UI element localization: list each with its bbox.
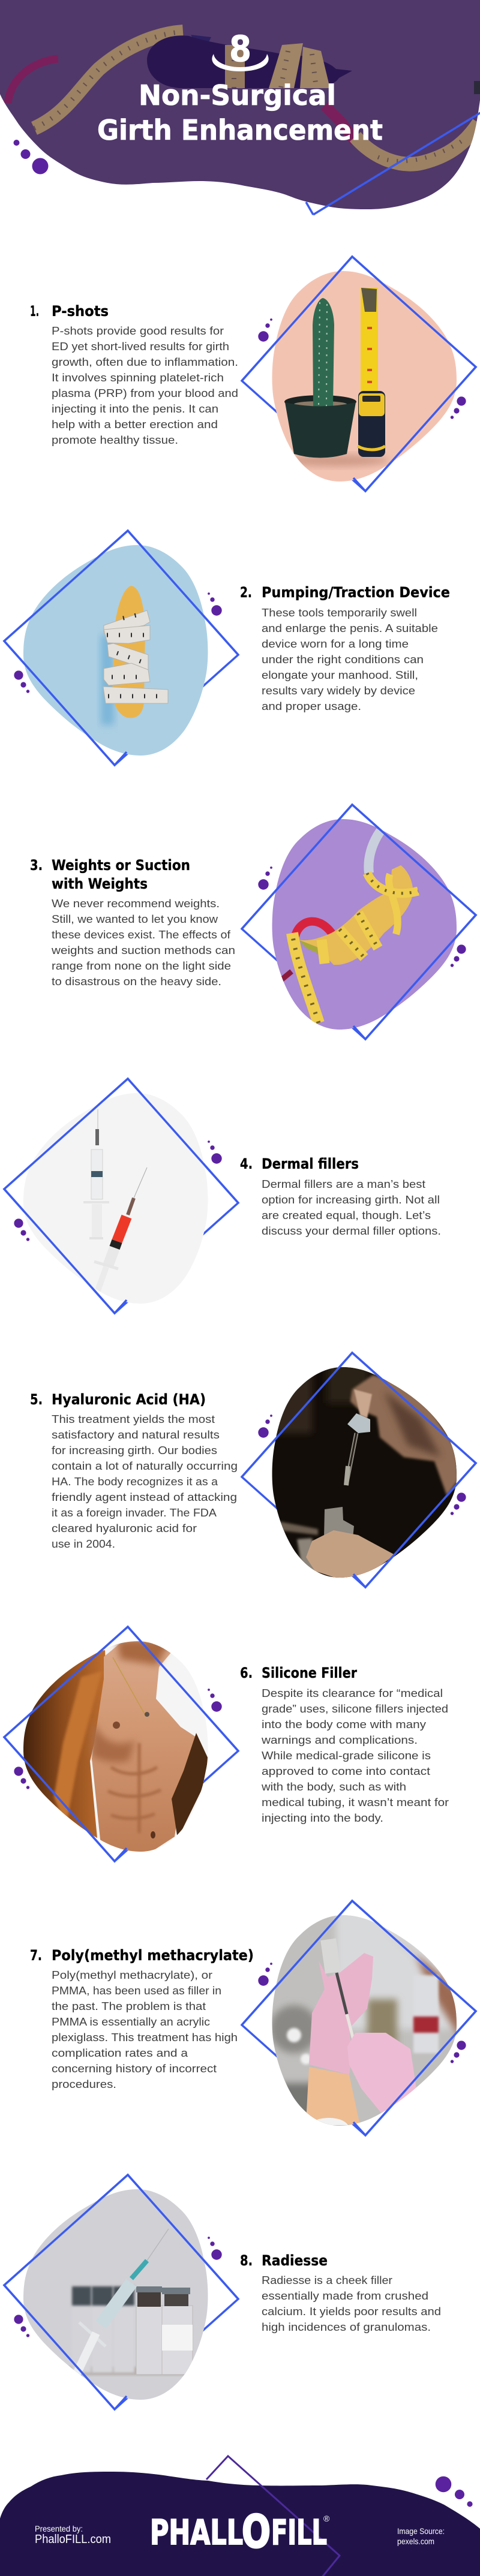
text block: growth, often due to inflammation. bbox=[52, 356, 238, 368]
logo: PHALL bbox=[150, 2513, 243, 2553]
footer dots bbox=[436, 2476, 473, 2507]
text block: satisfactory and natural results bbox=[52, 1428, 220, 1441]
image panel: banana wrapped in tape bbox=[242, 805, 476, 1039]
title: Girth Enhancement bbox=[97, 114, 383, 146]
text block: essentially made from crushed bbox=[262, 2289, 428, 2302]
text block: to disastrous on the heavy side. bbox=[52, 975, 221, 988]
image panel: gloved hands with syringe bbox=[242, 1901, 476, 2135]
text block: friendly agent instead of attacking bbox=[52, 1491, 237, 1503]
title number with crescent bbox=[212, 28, 269, 71]
heading: Pumping/Traction Device bbox=[262, 584, 450, 601]
text block: plasma (PRP) from your blood and bbox=[52, 387, 238, 399]
text block: for increasing girth. Our bodies bbox=[52, 1444, 217, 1456]
text block: These tools temporarily swell bbox=[262, 606, 417, 619]
text block: Dermal fillers are a man’s best bbox=[262, 1178, 425, 1190]
heading bbox=[240, 2252, 328, 2269]
text block: promote healthy tissue. bbox=[52, 434, 178, 446]
heading: 1. bbox=[30, 303, 39, 320]
text block: these devices exist. The effects of bbox=[52, 928, 231, 941]
text block: elongate your manhood. Still, bbox=[262, 669, 418, 681]
heading: 2. bbox=[240, 584, 252, 601]
text block: Poly(methyl methacrylate), or bbox=[52, 1969, 212, 1981]
heading: Poly(methyl methacrylate) bbox=[52, 1947, 254, 1964]
decorative diamond corner: hidden part bbox=[306, 202, 313, 215]
text block bbox=[261, 1687, 449, 1824]
text block: and proper usage. bbox=[262, 700, 361, 712]
text block: Despite its clearance for “medical bbox=[262, 1687, 443, 1699]
dots bbox=[14, 1140, 222, 1241]
dots bbox=[258, 1963, 466, 2063]
text block bbox=[262, 606, 438, 712]
text block: complication rates and a bbox=[52, 2047, 188, 2059]
logo bbox=[150, 2505, 330, 2558]
text block: and enlarge the penis. A suitable bbox=[262, 622, 438, 634]
text block: calcium. It yields poor results and bbox=[262, 2305, 441, 2318]
text block: injecting into the body. bbox=[262, 1811, 383, 1824]
presented by bbox=[35, 2524, 111, 2546]
text block: approved to come into contact bbox=[262, 1765, 430, 1777]
footer blob bbox=[0, 2472, 480, 2576]
image panel: vials and syringe bbox=[4, 2175, 238, 2409]
text block: with the body, such as with bbox=[261, 1780, 406, 1793]
text block: concerning history of incorrect bbox=[52, 2062, 217, 2075]
heading bbox=[30, 857, 190, 892]
text block: are created equal, though. Let’s bbox=[262, 1209, 431, 1221]
title number with crescent: 8 bbox=[229, 28, 251, 70]
text block: medical tubing, it wasn’t meant for bbox=[262, 1796, 449, 1808]
decorative diamond corner: front part bbox=[313, 105, 480, 215]
presented by: PhalloFILL.com bbox=[35, 2533, 111, 2546]
text block: HA. The body recognizes it as a bbox=[52, 1475, 218, 1488]
heading: 5. bbox=[30, 1391, 43, 1408]
text block: device worn for a long time bbox=[262, 637, 409, 650]
text block: grade” uses, silicone fillers injected bbox=[262, 1702, 448, 1715]
dots bbox=[258, 1415, 466, 1515]
dots bbox=[14, 2237, 222, 2337]
text block: ED yet short-lived results for girth bbox=[52, 340, 229, 353]
logo: FILL bbox=[271, 2513, 327, 2553]
text block: plexiglass. This treatment has high bbox=[52, 2031, 238, 2044]
image panel: male torso bbox=[4, 1627, 238, 1861]
panel: 5 Hyaluronic Acid bbox=[30, 1353, 476, 1587]
panel: 4 Dermal fillers bbox=[4, 1079, 441, 1313]
dots bbox=[14, 592, 222, 693]
text block: cleared hyaluronic acid for bbox=[52, 1522, 197, 1534]
presented by: Presented by: bbox=[35, 2524, 83, 2533]
title: Non-Surgical bbox=[139, 79, 336, 112]
text block: range from none on the light side bbox=[52, 959, 231, 972]
text block bbox=[262, 1178, 441, 1237]
heading: with Weights bbox=[52, 875, 148, 892]
text block: While medical-grade silicone is bbox=[262, 1749, 431, 1762]
heading: Silicone Filler bbox=[262, 1665, 357, 1681]
text block: it as a foreign invader. The FDA bbox=[52, 1506, 217, 1519]
text block: P-shots provide good results for bbox=[52, 324, 224, 337]
heading: 3. bbox=[30, 857, 43, 874]
text block: PMMA is essentially an acrylic bbox=[52, 2015, 210, 2028]
logo: ® bbox=[323, 2514, 330, 2523]
header blob background bbox=[0, 0, 480, 209]
panel: 2 Pumping/Traction Device bbox=[4, 531, 450, 765]
footer diamond outline bbox=[206, 2456, 340, 2576]
text block: injecting it into the penis. It can bbox=[52, 402, 218, 415]
text block: discuss your dermal filler options. bbox=[262, 1224, 441, 1237]
text block: weights and suction methods can bbox=[51, 944, 235, 956]
panel: 3 Weights or Suction bbox=[30, 805, 476, 1039]
text block: results vary widely by device bbox=[262, 684, 415, 697]
heading bbox=[30, 303, 109, 320]
text block: use in 2004. bbox=[52, 1537, 115, 1550]
image panel: two syringes bbox=[4, 1079, 238, 1313]
text block: under the right conditions can bbox=[262, 653, 424, 666]
text block: into the body come with many bbox=[262, 1718, 427, 1731]
panel: 1 P-shots bbox=[30, 257, 476, 491]
heading: Dermal fillers bbox=[262, 1155, 359, 1172]
text block: We never recommend weights. bbox=[52, 897, 220, 910]
image source: Image Source: bbox=[397, 2526, 445, 2536]
dots bbox=[258, 866, 466, 967]
dots bbox=[14, 1689, 222, 1789]
text block: It involves spinning platelet-rich bbox=[52, 371, 224, 384]
heading: P-shots bbox=[52, 303, 109, 320]
text block: PMMA, has been used as filler in bbox=[52, 1984, 221, 1997]
header photo: eggplant wrapped with measuring tape bbox=[8, 32, 480, 164]
header banner bbox=[0, 0, 480, 215]
text block bbox=[262, 2274, 441, 2333]
heading: 6. bbox=[240, 1665, 253, 1681]
dots bbox=[13, 140, 48, 174]
logo: O bbox=[242, 2505, 271, 2558]
image panel: corn wrapped in tape bbox=[4, 531, 238, 765]
heading: 8. bbox=[240, 2252, 253, 2269]
image panel: dropper and bottle bbox=[242, 1353, 476, 1587]
text block bbox=[51, 897, 235, 988]
heading: Radiesse bbox=[262, 2252, 328, 2269]
heading: Weights or Suction bbox=[52, 857, 190, 874]
title bbox=[97, 79, 383, 146]
heading: 7. bbox=[30, 1947, 42, 1964]
text block: Still, we wanted to let you know bbox=[52, 913, 218, 925]
text block: help with a better erection and bbox=[52, 418, 218, 431]
text block bbox=[52, 1413, 238, 1550]
text block: warnings and complications. bbox=[261, 1734, 418, 1746]
text block: Radiesse is a cheek filler bbox=[262, 2274, 392, 2286]
heading: Hyaluronic Acid (HA) bbox=[52, 1391, 206, 1408]
text block: This treatment yields the most bbox=[52, 1413, 215, 1425]
image source: pexels.com bbox=[397, 2536, 434, 2546]
footer bbox=[0, 2456, 480, 2576]
panel: 7 Poly(methyl methacrylate) bbox=[30, 1901, 476, 2135]
image panel: cactus and tape measure bbox=[242, 257, 476, 491]
text block: contain a lot of naturally occurring bbox=[52, 1459, 238, 1472]
dots bbox=[258, 318, 466, 419]
panel: 8 Radiesse bbox=[4, 2175, 441, 2409]
heading: 4. bbox=[240, 1155, 253, 1172]
text block: procedures. bbox=[52, 2078, 116, 2090]
text block: the past. The problem is that bbox=[52, 2000, 206, 2012]
text block bbox=[52, 324, 238, 446]
image source bbox=[397, 2526, 445, 2546]
panel: 6 Silicone Filler bbox=[4, 1627, 449, 1861]
text block: high incidences of granulomas. bbox=[262, 2321, 431, 2333]
text block bbox=[52, 1969, 238, 2090]
text block: option for increasing girth. Not all bbox=[262, 1193, 440, 1206]
